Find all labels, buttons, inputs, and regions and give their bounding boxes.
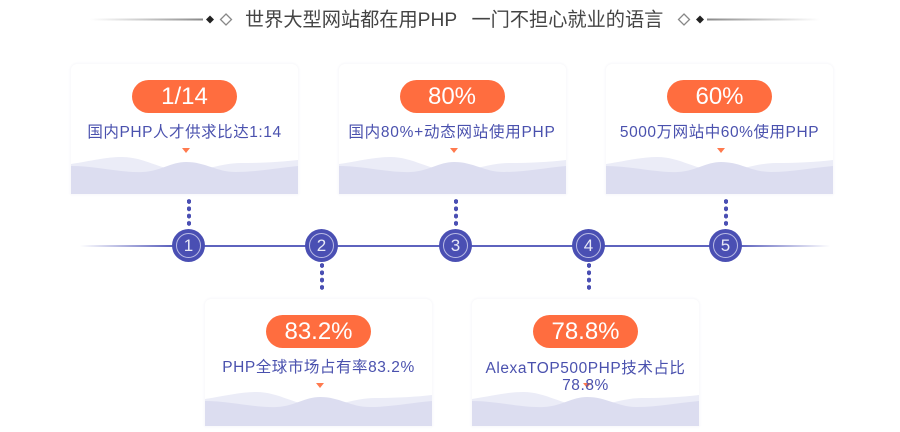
node 2: 2 [317, 236, 326, 255]
arrow [182, 148, 190, 153]
card 2 [205, 299, 432, 426]
stat pill: 1/14 [161, 83, 208, 110]
wave [339, 157, 566, 194]
node 2 [305, 229, 338, 262]
connector 4 [587, 263, 591, 290]
node 3 [439, 229, 472, 262]
connector 5 [724, 199, 728, 226]
stat pill [533, 315, 638, 348]
arrow [717, 148, 725, 153]
wave [205, 392, 432, 426]
arrow [583, 383, 591, 388]
description: 国内80%+动态网站使用PHP [348, 124, 556, 141]
stat pill [132, 80, 237, 113]
node 3: 3 [451, 236, 460, 255]
stat pill: 60% [695, 83, 744, 110]
connector 1 [187, 199, 191, 226]
wave [71, 157, 298, 194]
description [486, 360, 686, 394]
title text: 世界大型网站都在用PHP 一门不担心就业的语言 [245, 10, 663, 31]
stat pill: 78.8% [551, 318, 620, 345]
arrow [450, 148, 458, 153]
node 4: 4 [584, 236, 593, 255]
card 1 [71, 64, 298, 194]
description: 5000万网站中60%使用PHP [620, 124, 819, 141]
description: 国内PHP人才供求比达1:14 [87, 124, 282, 141]
card 3 [338, 64, 566, 194]
left title ornament [99, 13, 232, 26]
stat pill [400, 80, 504, 113]
stat pill [266, 315, 371, 348]
connector 3 [454, 199, 458, 226]
description: AlexaTOP500PHP技术占比 [486, 360, 686, 377]
description: PHP全球市场占有率83.2% [222, 359, 415, 376]
connector 2 [320, 263, 324, 290]
right title ornament [678, 13, 811, 26]
node 4 [572, 229, 605, 262]
title [99, 10, 811, 31]
wave [606, 157, 833, 194]
node 1: 1 [184, 236, 193, 255]
stat pill: 80% [428, 83, 476, 110]
node 5 [709, 229, 742, 262]
stat pill [667, 80, 772, 113]
timeline line [80, 245, 830, 247]
node 5: 5 [721, 236, 730, 255]
wave [472, 392, 699, 426]
stat pill: 83.2% [284, 318, 353, 345]
node 1 [172, 229, 205, 262]
arrow [316, 383, 324, 388]
description: 78.8% [562, 377, 609, 394]
card 5 [606, 64, 833, 194]
card 4 [472, 299, 699, 426]
